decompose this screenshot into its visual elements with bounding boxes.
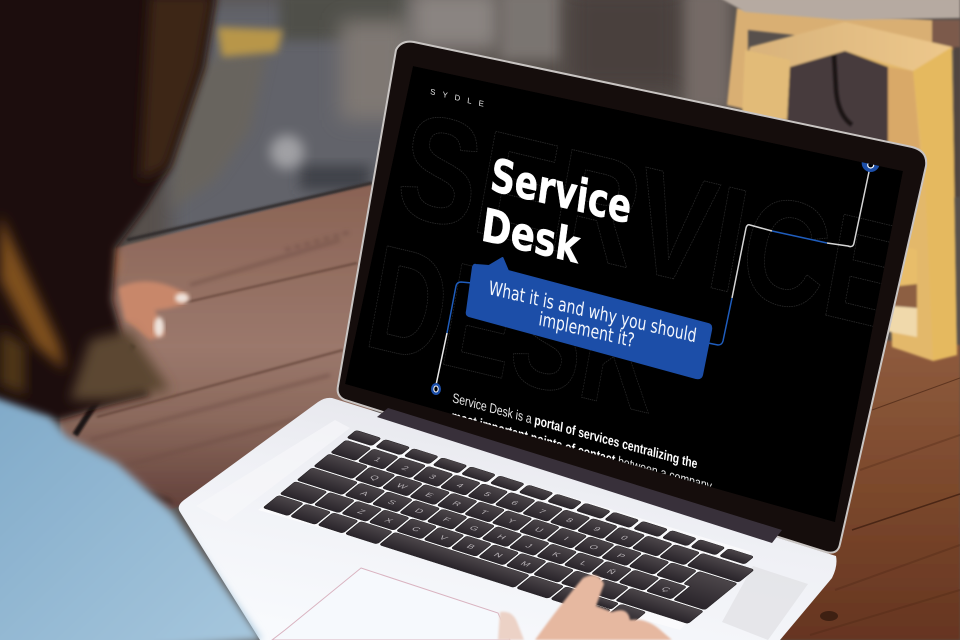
key legends: N	[492, 551, 505, 559]
logo: SYDLE	[430, 87, 484, 109]
subtitle: What it is and why you should	[487, 277, 698, 347]
wooden lamp frame	[727, 8, 960, 361]
keyboard well	[258, 433, 752, 630]
left panel	[742, 50, 790, 120]
lamp shade	[720, 0, 960, 20]
person's fingers	[498, 575, 672, 640]
key legends	[321, 456, 706, 607]
key legends: E	[423, 491, 436, 499]
key legends: S	[386, 498, 399, 506]
key legends: R	[450, 500, 464, 507]
keyboard	[258, 430, 766, 638]
subtitle: implement it?	[537, 308, 636, 352]
lens and glasses	[170, 27, 283, 210]
person's shoulder in blue shirt	[0, 392, 262, 640]
person's hair	[0, 0, 218, 420]
key legends: 0	[619, 534, 631, 541]
inner dark opening	[787, 51, 888, 145]
key legends: 8	[564, 517, 576, 524]
key legends: 5	[482, 491, 494, 498]
wooden table: left	[60, 183, 372, 510]
key legends: J	[523, 542, 535, 549]
title	[483, 158, 630, 264]
key legends: P	[615, 552, 628, 560]
touchpad	[272, 568, 510, 640]
key legends: F	[441, 516, 453, 523]
title: Desk	[479, 197, 584, 274]
key legends: 2	[399, 465, 411, 472]
key legends: X	[382, 517, 395, 524]
inner side	[888, 67, 920, 150]
laptop base	[179, 398, 836, 640]
key legends: Q	[368, 474, 382, 481]
key legends: O	[587, 543, 601, 551]
key legends: W	[394, 482, 411, 491]
key legends: M	[519, 560, 533, 568]
table far edge	[127, 183, 372, 240]
key legends: 7	[536, 508, 548, 515]
key legends: U	[532, 526, 546, 533]
key legends: T	[478, 509, 491, 516]
ghost outline word: DESK: DESK	[356, 214, 673, 445]
wooden table: right	[780, 340, 960, 640]
body text: most important points of contact between a company	[451, 408, 713, 494]
key legends: Ç	[659, 585, 673, 593]
key legends: K	[550, 551, 563, 558]
key legends: C	[410, 525, 423, 533]
connector node: right	[862, 162, 880, 172]
back frame	[727, 8, 932, 110]
title: Service	[488, 147, 635, 234]
key legends: I	[562, 535, 571, 542]
key legends: 6	[509, 499, 521, 506]
key legends: Y	[505, 517, 518, 525]
dark object edge	[75, 345, 133, 435]
key legends: 1	[372, 456, 384, 463]
top bars	[745, 22, 952, 71]
subtitle	[490, 280, 696, 346]
key legends: 9	[591, 525, 603, 533]
key legends: D	[413, 507, 426, 515]
person's hand	[95, 244, 189, 340]
key legends: G	[467, 524, 481, 532]
hinge strip	[377, 408, 782, 543]
key legends: Z	[355, 508, 368, 515]
connector line: left	[436, 282, 472, 385]
key legends: L	[578, 560, 590, 567]
lid bezel	[338, 42, 926, 553]
text cut-off mask	[680, 478, 834, 522]
key legends: A	[358, 490, 371, 497]
key legends: Ñ	[605, 568, 618, 576]
screen	[345, 66, 903, 522]
connector node: left	[431, 383, 441, 395]
body text: Service Desk is a portal of services centralizing the	[452, 390, 699, 472]
key legends: 3	[427, 473, 439, 480]
key legends: V	[437, 534, 450, 541]
right leg	[913, 47, 957, 361]
keys	[261, 430, 766, 638]
laptop lid	[336, 40, 928, 554]
front frame face	[743, 22, 957, 361]
speech bubble	[467, 258, 711, 378]
key legends: H	[495, 533, 508, 541]
key legends: B	[465, 543, 478, 550]
key legends: 4	[454, 482, 466, 489]
lower panes	[880, 240, 917, 290]
connector line: right	[708, 167, 870, 345]
